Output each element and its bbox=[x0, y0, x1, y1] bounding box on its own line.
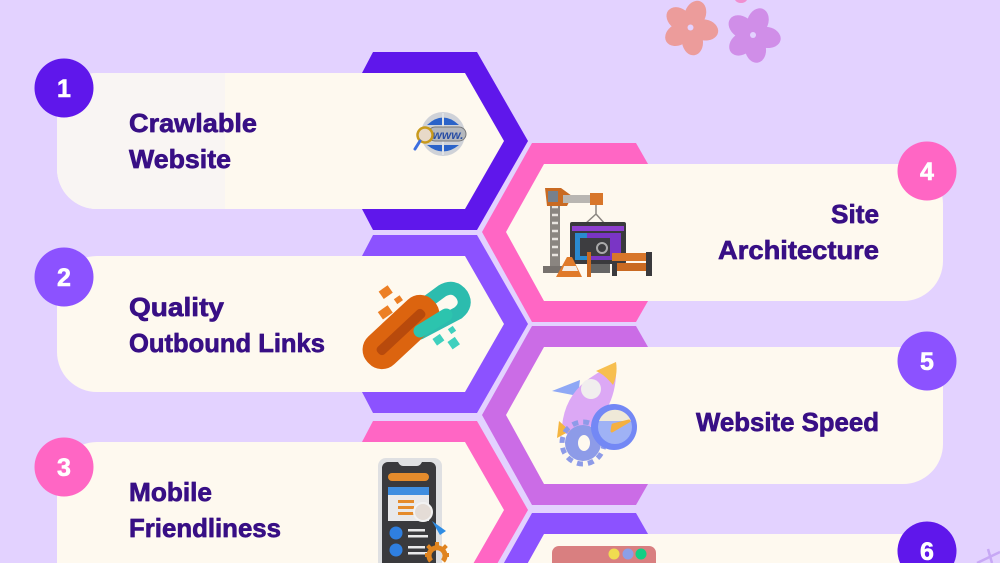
heading: mobile friendliness bbox=[129, 477, 281, 543]
panel: step 6 bbox=[504, 513, 956, 563]
heading: crawlable website: Crawlable bbox=[129, 108, 257, 138]
icon: rocket with gauge bbox=[552, 362, 637, 464]
number badge 2 bbox=[34, 248, 94, 306]
heading: quality outbound links: Outbound Links bbox=[129, 328, 325, 358]
heading: crawlable website bbox=[129, 108, 257, 174]
heading: website speed: Website Speed bbox=[696, 407, 879, 437]
number badge 4 bbox=[898, 142, 956, 200]
heading: site architecture: Site bbox=[831, 199, 879, 229]
icon: pink flower fragment bbox=[735, 0, 747, 3]
panel: step 1 crawlable website bbox=[34, 52, 528, 230]
heading: site architecture: Architecture bbox=[718, 235, 879, 265]
number badge 1 bbox=[34, 58, 94, 118]
heading: mobile friendliness: Friendliness bbox=[129, 513, 281, 543]
icon: smartphone bbox=[378, 458, 449, 563]
icon: browser window bbox=[552, 546, 656, 563]
number badge 5 bbox=[898, 332, 956, 390]
panel: step 2 quality outbound links bbox=[34, 235, 528, 413]
number badge 5: 5 bbox=[920, 348, 934, 376]
icon: www globe: www. bbox=[433, 128, 463, 142]
heading: quality outbound links: Quality bbox=[129, 292, 225, 322]
panel: step 4 site architecture bbox=[482, 142, 956, 322]
number badge 6 bbox=[898, 522, 956, 563]
number badge 2: 2 bbox=[57, 264, 71, 292]
icon: coral flower bbox=[661, 0, 720, 57]
panel: step 5 website speed bbox=[482, 326, 956, 505]
decoration: sparkle bbox=[977, 549, 1000, 563]
heading: quality outbound links bbox=[129, 292, 325, 358]
heading: crawlable website: Website bbox=[129, 144, 231, 174]
icon: purple flower bbox=[724, 5, 782, 64]
panel: step 3 mobile friendliness bbox=[34, 421, 528, 563]
number badge 3: 3 bbox=[57, 454, 71, 482]
number badge 4: 4 bbox=[920, 158, 934, 186]
icon: crane and browser bbox=[543, 188, 652, 277]
number badge 1: 1 bbox=[57, 75, 71, 103]
number badge 3 bbox=[34, 438, 94, 496]
icon: www globe bbox=[415, 112, 466, 156]
heading: mobile friendliness: Mobile bbox=[129, 477, 212, 507]
heading: site architecture bbox=[718, 199, 879, 265]
icon: chain link bbox=[365, 285, 464, 367]
